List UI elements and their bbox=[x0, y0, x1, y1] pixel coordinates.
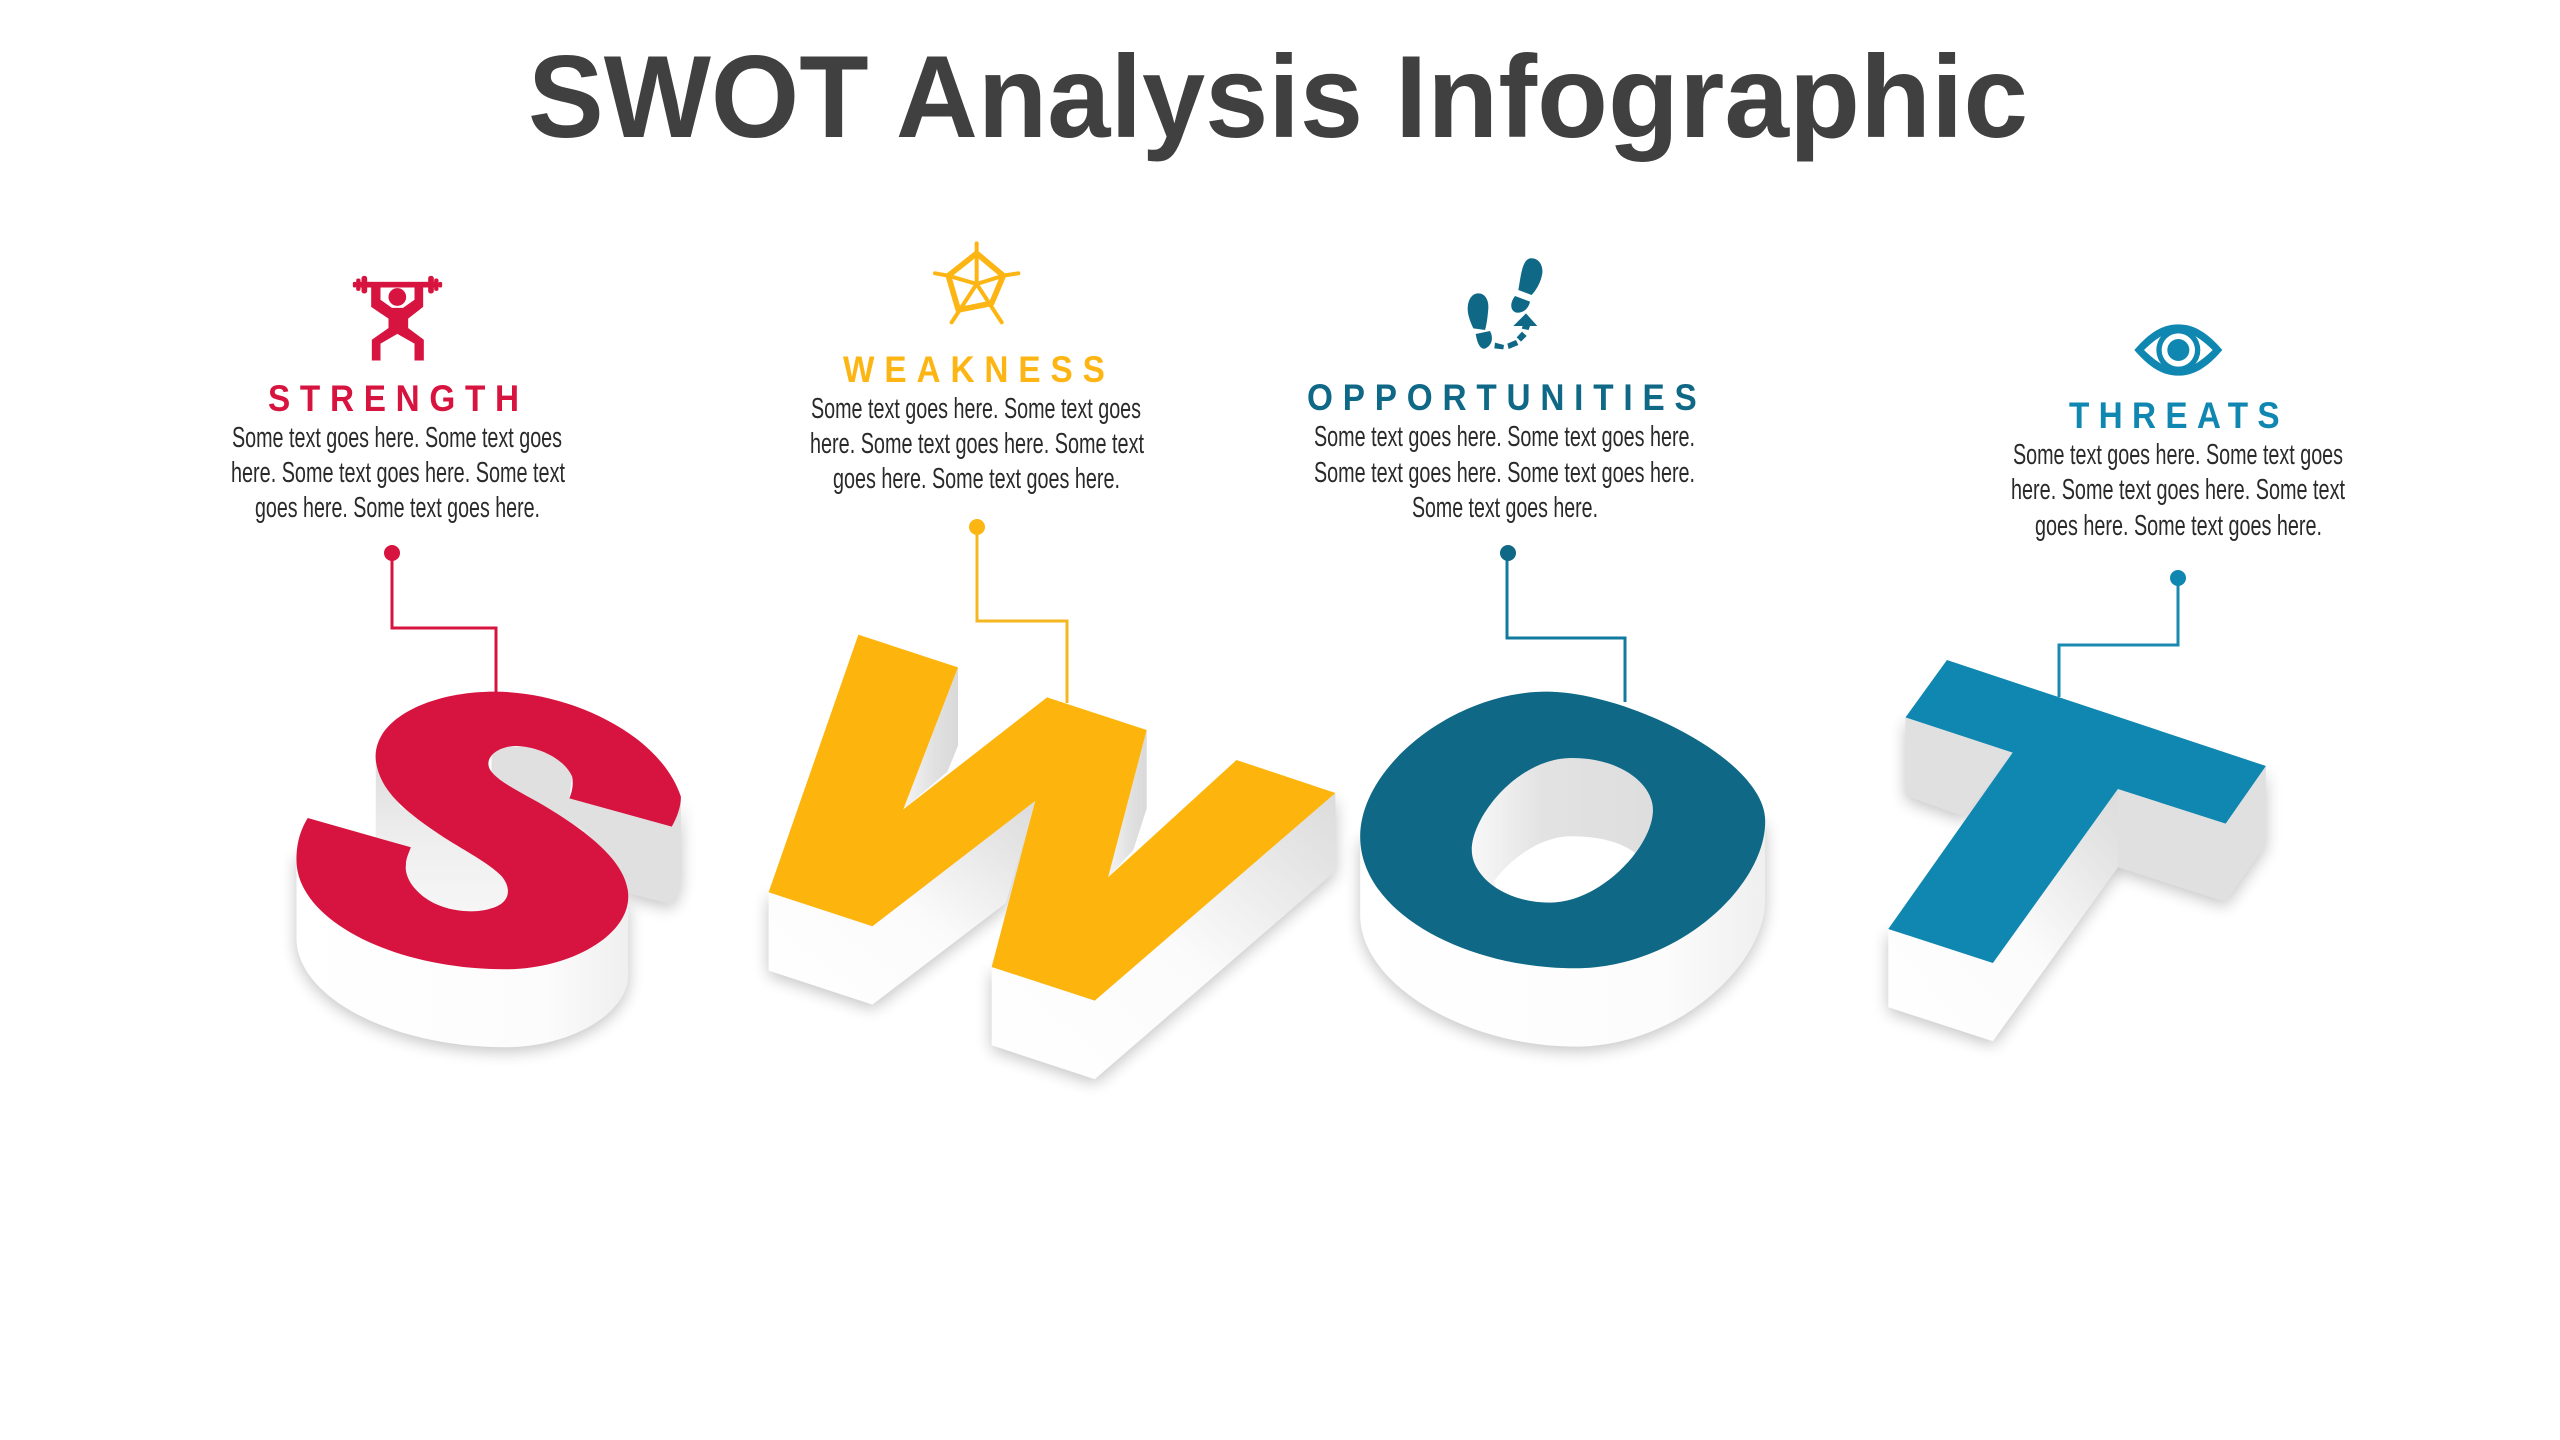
3D letter O bbox=[1360, 692, 1765, 1051]
text block: weakness bbox=[810, 393, 1144, 495]
title: Infographic bbox=[1395, 31, 2028, 162]
title: SWOT Analysis bbox=[528, 31, 1363, 162]
panel: strength bbox=[231, 276, 565, 692]
text block: weakness: goes here. Some text goes here. bbox=[833, 463, 1120, 495]
text block: opportunities: Some text goes here. bbox=[1412, 492, 1598, 524]
panel: opportunities bbox=[1307, 258, 1697, 702]
text block: threats bbox=[2011, 439, 2345, 542]
icon: footprints bbox=[1468, 258, 1542, 349]
text block: weakness: Some text goes here. Some text goes bbox=[811, 393, 1141, 425]
heading: weakness: WEAKNESS bbox=[843, 349, 1105, 390]
text block: threats: here. Some text goes here. Some text bbox=[2011, 474, 2345, 506]
text block: weakness: here. Some text goes here. Some text bbox=[810, 428, 1144, 460]
text block: threats: Some text goes here. Some text goes bbox=[2013, 439, 2343, 471]
text block: strength: here. Some text goes here. Some text bbox=[231, 457, 565, 489]
heading: strength: STRENGTH bbox=[268, 378, 519, 419]
text block: opportunities: Some text goes here. Some text goes here. bbox=[1314, 457, 1695, 489]
heading: opportunities: OPPORTUNITIES bbox=[1307, 377, 1697, 418]
text block: strength bbox=[231, 422, 565, 524]
text block: strength: goes here. Some text goes here. bbox=[255, 492, 540, 524]
text block: opportunities: Some text goes here. Some text goes here. bbox=[1314, 421, 1695, 453]
text block: strength: Some text goes here. Some text goes bbox=[232, 422, 562, 454]
icon: spider web bbox=[935, 243, 1018, 322]
3D letter T bbox=[1888, 660, 2266, 1045]
text block: opportunities bbox=[1314, 421, 1695, 524]
connector: opportunities bbox=[1500, 545, 1625, 702]
panel: weakness bbox=[810, 243, 1144, 703]
title bbox=[528, 31, 2028, 162]
connector: threats bbox=[2059, 570, 2186, 697]
text block: threats: goes here. Some text goes here. bbox=[2035, 510, 2322, 542]
panel: threats bbox=[2011, 324, 2345, 697]
icon: eye bbox=[2134, 324, 2222, 376]
connector: weakness bbox=[969, 519, 1067, 703]
3D letter S bbox=[296, 692, 681, 1051]
heading: threats: THREATS bbox=[2069, 395, 2280, 436]
3D letter W bbox=[769, 635, 1335, 1083]
icon: weightlifter bbox=[353, 276, 442, 360]
connector: strength bbox=[384, 545, 496, 692]
